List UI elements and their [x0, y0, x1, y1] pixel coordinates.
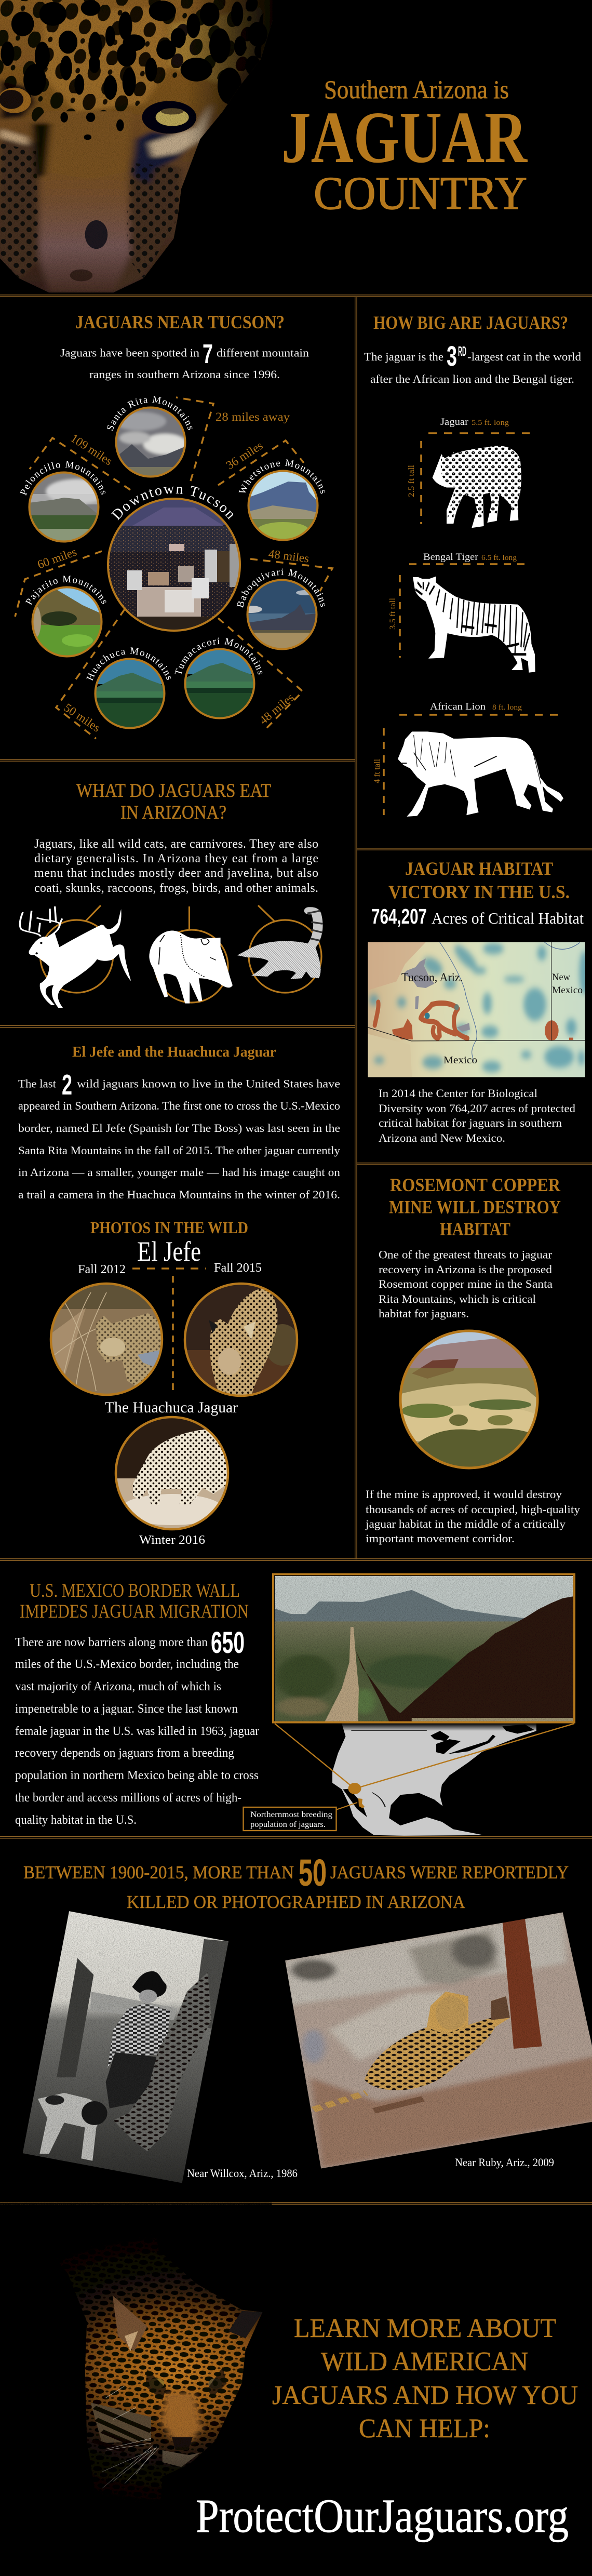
heading: Rosemont copper mine: ROSEMONT COPPER: [390, 1174, 561, 1195]
photo: Huachuca jaguar winter 2016: [116, 1417, 228, 1530]
heading: what do jaguars eat: [76, 780, 271, 823]
body text: a trail a camera in the Huachuca Mountains in the winter of 2016.: [18, 1188, 340, 1201]
panel: killed or photographed: [19, 1852, 592, 2185]
body text: quality habitat in the U.S.: [15, 1813, 137, 1827]
panel: how big are jaguars: [364, 312, 581, 817]
size: lion measures: African Lion: [430, 701, 486, 712]
hero: jaguar face photo: [0, 0, 279, 298]
intro text: Jaguars have been spotted in: [60, 346, 199, 359]
heading: jaguar habitat victory: [388, 858, 570, 902]
call to action: learn more: CAN HELP:: [359, 2414, 490, 2444]
body text: Diversity won 764,207 acres of protected: [379, 1102, 575, 1115]
label: Fall 2015: Fall 2015: [214, 1261, 262, 1275]
heading: El Jefe and the Huachuca Jaguar: El Jefe and the Huachuca Jaguar: [72, 1044, 276, 1060]
photo: Near Ruby 2009: [276, 1906, 592, 2173]
map: critical habitat: New: [552, 972, 570, 983]
label: 109 miles: 109 miles: [69, 432, 115, 468]
heading: border wall: IMPEDES JAGUAR MIGRATION: [20, 1601, 249, 1622]
body text: Arizona and New Mexico.: [379, 1131, 505, 1144]
size: jaguar measures: 2.5 ft tall: [407, 464, 416, 497]
size: tiger measures: 3.5 ft tall: [388, 597, 397, 630]
photo: Huachuca Mountains: [86, 647, 171, 729]
body text: threats: recovery in Arizona is the proposed: [379, 1263, 552, 1276]
title: COUNTRY: COUNTRY: [314, 168, 527, 219]
size: lion measures: 8 ft. long: [492, 703, 522, 712]
photo: Pajarito Mountains: Pajarito Mountains: [25, 576, 106, 606]
body text: wild jaguars known to live in the United States have: [77, 1077, 340, 1090]
heading: more than 50 jaguars: KILLED OR PHOTOGRAPHED IN ARIZONA: [127, 1892, 466, 1912]
photo: Baboquivari Mountains: [237, 568, 325, 650]
intro text: [364, 341, 581, 385]
label: 48 miles to Tumacacori: 48 miles: [257, 691, 297, 727]
photo: downtown Tucson: [107, 486, 241, 632]
map: North America: [332, 1724, 540, 1836]
intro text: [60, 339, 309, 381]
arrows: zoom lines from map to photo: [275, 1724, 574, 1787]
photo: Peloncillo Mountains: Peloncillo Mountains: [20, 461, 106, 496]
callout: northernmost breeding population: Northernmost breeding: [250, 1810, 332, 1819]
panel: border wall: [15, 1574, 574, 1836]
callout: northernmost breeding population: population of jaguars.: [250, 1820, 326, 1829]
map: critical habitat: Mexico: [443, 1055, 477, 1066]
heading: what do jaguars eat: WHAT DO JAGUARS EAT: [76, 780, 271, 802]
heading: border wall: U.S. MEXICO BORDER WALL: [30, 1580, 240, 1601]
photo: Santa Rita Mountains: Santa Rita Mountains: [107, 396, 192, 431]
heading: border wall: [20, 1580, 249, 1622]
title: JAGUAR: JAGUAR: [281, 96, 528, 178]
body text: threats: habitat for jaguars.: [379, 1307, 469, 1320]
size: tiger measures: 6.5 ft. long: [481, 554, 517, 562]
photo: Whetstone Mountains: [239, 459, 325, 541]
photo: Baboquivari Mountains: Baboquivari Mountains: [237, 568, 325, 608]
heading: more than 50 jaguars: 50: [299, 1852, 327, 1894]
body text: [34, 837, 318, 895]
body text: mine impact: [365, 1488, 580, 1545]
caption: Near Willcox: Near Willcox, Ariz., 1986: [187, 2167, 298, 2180]
panel: jaguar habitat victory: [368, 858, 589, 1144]
photo: Rosemont landscape: [399, 1330, 539, 1469]
size: tiger measures: Bengal Tiger: [423, 552, 479, 563]
photo: Tumacacori Mountains: Tumacacori Mountains: [174, 638, 263, 674]
body text: mine impact: jaguar habitat in the middle of a critically: [365, 1517, 566, 1530]
heading: jaguars near Tucson: JAGUARS NEAR TUCSON?: [75, 312, 285, 332]
stat: 764,207 acres: 764,207: [371, 904, 427, 928]
label: Winter 2016: Winter 2016: [139, 1533, 205, 1547]
body text: [18, 1069, 340, 1201]
label: Fall 2012: Fall 2012: [78, 1263, 126, 1276]
photo: Pajarito Mountains: [25, 576, 106, 658]
heading: more than 50 jaguars: BETWEEN 1900-2015, MORE THAN: [23, 1862, 294, 1883]
heading: Rosemont copper mine: HABITAT: [440, 1219, 510, 1239]
body text: Jaguars, like all wild cats, are carnivores. They are also: [34, 837, 318, 851]
panel: El Jefe and the Huachuca Jaguar: [18, 1044, 340, 1547]
label: El Jefe: El Jefe: [137, 1236, 201, 1267]
label: 36 miles: 36 miles: [224, 439, 265, 472]
heading: Rosemont copper mine: MINE WILL DESTROY: [389, 1197, 561, 1218]
body text: in Arizona — a smaller, younger male — had his image caught on: [18, 1166, 340, 1179]
icon: jaguar silhouette: [433, 446, 521, 528]
photo: Santa Rita Mountains: [107, 396, 192, 478]
call to action: learn more: [272, 2314, 578, 2444]
body text: mine impact: If the mine is approved, it would destroy: [366, 1488, 562, 1501]
intro text: after the African lion and the Bengal tiger.: [370, 372, 574, 385]
stat: 764,207 acres: [371, 904, 584, 928]
size: jaguar measures: [407, 417, 530, 524]
intro text: different mountain: [217, 346, 309, 359]
heading: more than 50 jaguars: JAGUARS WERE REPORTEDLY: [330, 1862, 569, 1883]
subheading: photos in the wild: PHOTOS IN THE WILD: [90, 1218, 248, 1237]
body text: threats: Rita Mountains, which is critical: [379, 1292, 536, 1305]
body text: border, named El Jefe (Spanish for The Boss) was last seen in the: [18, 1122, 340, 1134]
body text: appeared in Southern Arizona. The first one to cross the U.S.-Mexico: [18, 1099, 340, 1112]
body text: threats: [379, 1248, 553, 1320]
size: jaguar measures: Jaguar: [440, 417, 469, 428]
title: Southern Arizona is: Southern Arizona is: [324, 75, 509, 104]
heading: more than 50 jaguars: [23, 1852, 569, 1912]
body text: 2: [62, 1069, 72, 1101]
body text: miles of the U.S.-Mexico border, including the: [15, 1658, 239, 1671]
icon: prey rings: [41, 905, 321, 1003]
intro text: RD: [458, 343, 466, 359]
call to action: learn more: LEARN MORE ABOUT: [294, 2314, 556, 2343]
body text: critical habitat for jaguars in southern: [379, 1116, 562, 1129]
body text: menu that includes mostly deer and javelina, but also: [34, 866, 318, 880]
icon: tiger silhouette: [413, 577, 535, 673]
label: 60 miles: 60 miles: [36, 545, 78, 571]
heading: jaguar habitat victory: JAGUAR HABITAT: [405, 858, 553, 879]
heading: jaguar habitat victory: VICTORY IN THE U.S.: [388, 882, 570, 902]
icon: deer: [20, 906, 131, 1008]
body text: In 2014 the Center for Biological: [379, 1087, 537, 1100]
body text: dietary generalists. In Arizona they eat from a large: [34, 852, 318, 865]
call to action: learn more: JAGUARS AND HOW YOU: [272, 2381, 578, 2410]
body text: threats: One of the greatest threats to jaguar: [379, 1248, 553, 1261]
photo: El Jefe fall 2012: [50, 1283, 163, 1395]
body text: The last: [18, 1077, 56, 1090]
body text: [379, 1087, 575, 1144]
label: 50 miles: 50 miles: [62, 701, 103, 735]
size: tiger measures: [388, 552, 530, 658]
body text: mine impact: thousands of acres of occupied, high-quality: [366, 1503, 580, 1516]
icon: Arizona location marker: [348, 1783, 361, 1794]
panel: Rosemont copper mine: [365, 1174, 580, 1545]
photo: Near Willcox 1986: [19, 1911, 231, 2185]
stat: 764,207 acres: Acres of Critical Habitat: [432, 909, 584, 927]
intro text: -largest cat in the world: [467, 350, 581, 363]
label: 48 miles to Baboquivari: 48 miles: [268, 547, 310, 565]
heading: what do jaguars eat: IN ARIZONA?: [120, 802, 226, 823]
photo: Peloncillo Mountains: [20, 461, 106, 542]
label: The Huachuca Jaguar: The Huachuca Jaguar: [105, 1399, 238, 1416]
icon: javelina: [149, 931, 233, 1004]
size: lion measures: [373, 701, 560, 815]
body text: 650: [211, 1626, 245, 1660]
call to action: learn more: WILD AMERICAN: [321, 2347, 528, 2377]
panel: jaguars near Tucson: [14, 312, 334, 740]
intro text: 3: [447, 341, 457, 372]
panel: what do jaguars eat: [20, 780, 322, 1008]
body text: threats: Rosemont copper mine in the Santa: [379, 1277, 553, 1290]
photo: Huachuca Mountains: Huachuca Mountains: [86, 647, 171, 681]
map: critical habitat: [368, 941, 589, 1077]
body text: female jaguar in the U.S. was killed in 1963, jaguar: [15, 1725, 259, 1738]
photo: El Jefe fall 2015: [185, 1284, 300, 1397]
map: critical habitat: Mexico: [552, 985, 583, 996]
photo: Tumacacori Mountains: [174, 638, 263, 719]
icon: breeding population range: [358, 1798, 365, 1808]
icon: coati: [237, 911, 322, 979]
body text: There are now barriers along more than: [15, 1636, 208, 1649]
photo: downtown Tucson: Downtown Tucson: [111, 486, 233, 520]
body text: vast majority of Arizona, much of which is: [15, 1680, 221, 1693]
callout: northernmost breeding population: [243, 1803, 357, 1831]
photo: border wall: [273, 1574, 574, 1723]
map: critical habitat: Tucson, Ariz.: [401, 971, 463, 984]
body text: [15, 1626, 259, 1827]
photo: Whetstone Mountains: Whetstone Mountains: [239, 459, 325, 493]
icon: lion silhouette: [398, 731, 563, 817]
photo: jaguar emerging from dark: [0, 2203, 272, 2576]
intro text: ranges in southern Arizona since 1996.: [89, 368, 280, 381]
intro text: The jaguar is the: [364, 350, 443, 363]
heading: Rosemont copper mine: [389, 1174, 561, 1239]
body text: coati, skunks, raccoons, frogs, birds, and other animals.: [34, 882, 318, 895]
body text: recovery depends on jaguars from a breeding: [15, 1746, 234, 1760]
intro text: 7: [203, 339, 213, 369]
body text: Santa Rita Mountains in the fall of 2015. The other jaguar currently: [18, 1144, 340, 1157]
body text: mine impact: important movement corridor.: [366, 1532, 515, 1545]
label: 28 miles away: 28 miles away: [216, 410, 290, 423]
size: lion measures: 4 ft tall: [373, 758, 382, 783]
body text: impenetrable to a jaguar. Since the last known: [15, 1702, 238, 1716]
distance routes: [15, 397, 332, 739]
size: jaguar measures: 5.5 ft. long: [472, 419, 509, 427]
caption: Near Ruby: Near Ruby, Ariz., 2009: [455, 2156, 554, 2169]
body text: population in northern Mexico being able to cross: [15, 1769, 259, 1782]
body text: the border and access millions of acres of high-: [15, 1791, 241, 1805]
